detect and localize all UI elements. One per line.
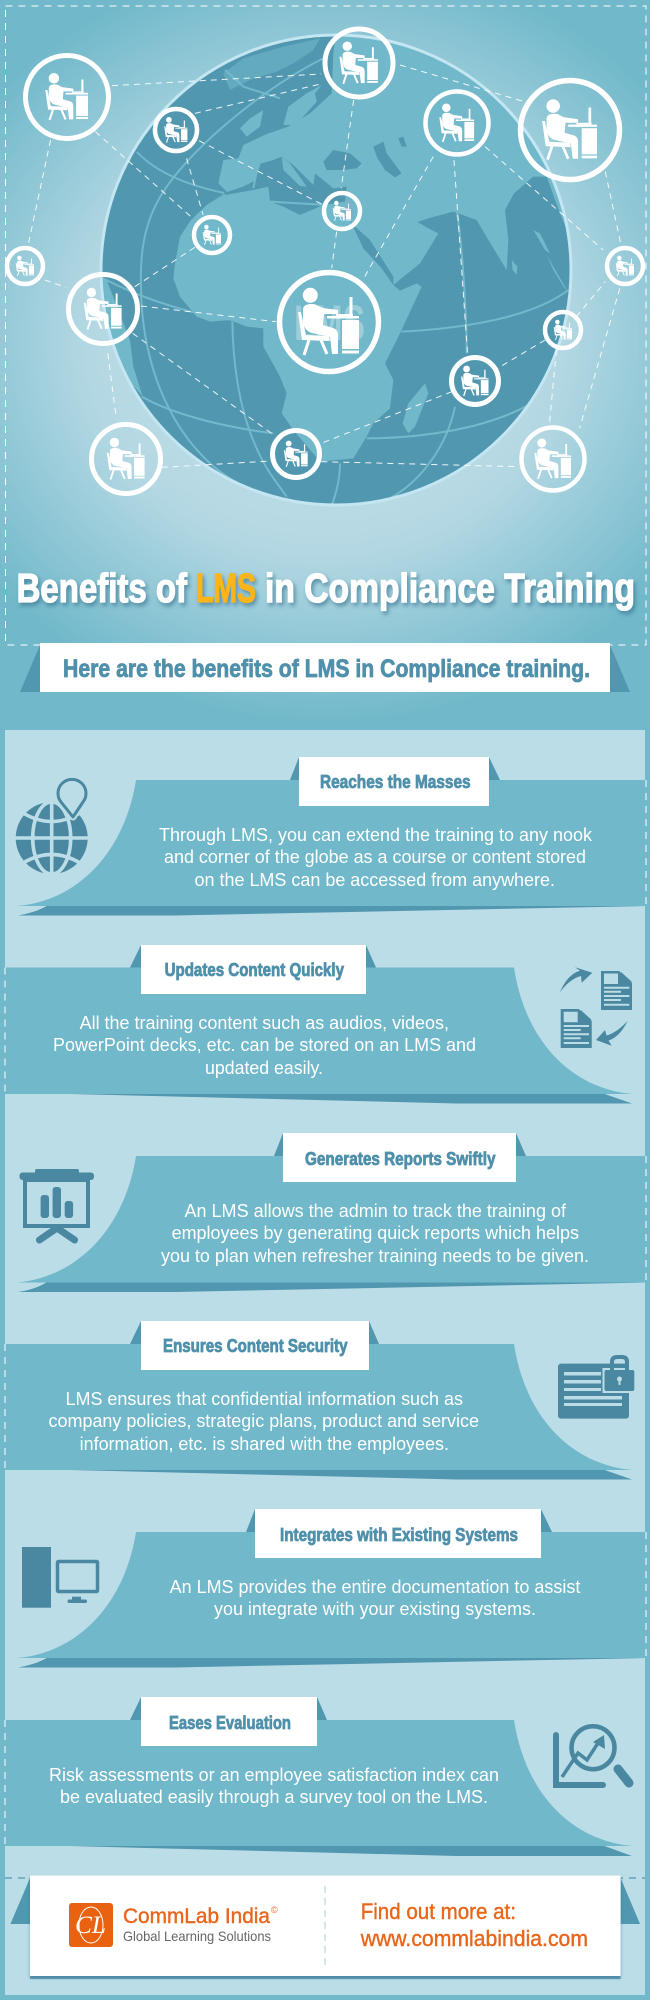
footer dashed rule	[5, 1877, 645, 1879]
header background	[0, 0, 650, 740]
node 12	[545, 312, 581, 348]
footer banner	[10, 1876, 640, 1979]
icon: documents and arrows	[560, 967, 632, 1048]
body text: LMS ensures that confidential information such as	[66, 1389, 463, 1409]
logo: Global Learning Solutions	[123, 1928, 271, 1944]
title: LMS	[196, 565, 256, 611]
body text	[53, 1013, 476, 1078]
title	[17, 565, 635, 611]
icon: presentation board	[20, 1169, 94, 1240]
benefits panel background	[5, 730, 645, 1995]
node 1	[26, 56, 108, 138]
body text: An LMS allows the admin to track the training of	[184, 1201, 567, 1221]
body text: on the LMS can be accessed from anywhere.	[194, 870, 555, 890]
node 10	[68, 274, 138, 344]
node 3	[426, 92, 488, 154]
card: Ensures Content Security	[5, 1321, 636, 1480]
body text: you to plan when refresher training needs to be given.	[161, 1246, 589, 1266]
icon: globe with pin	[14, 779, 90, 876]
globe: LMS	[294, 295, 365, 351]
body text: updated easily.	[205, 1058, 323, 1078]
body text: and corner of the globe as a course or content stored	[164, 847, 586, 867]
body text: PowerPoint decks, etc. can be stored on an LMS and	[53, 1035, 476, 1055]
icon: chart magnifier	[556, 1726, 629, 1785]
call to action: Find out more at:	[361, 1899, 516, 1924]
body text: information, etc. is shared with the employees.	[80, 1434, 449, 1454]
logo	[69, 1903, 278, 1947]
body text: employees by generating quick reports which helps	[172, 1223, 579, 1243]
node 4	[520, 80, 620, 180]
icon: locked document	[558, 1357, 636, 1419]
heading: Ensures Content Security	[163, 1336, 348, 1356]
body text: company policies, strategic plans, product and service	[48, 1411, 479, 1431]
heading: Reaches the Masses	[320, 772, 471, 792]
node 14	[272, 430, 320, 478]
body text	[159, 825, 593, 890]
call to action	[360, 1899, 588, 1951]
card: Integrates with Existing Systems	[18, 1509, 646, 1668]
card: Generates Reports Swiftly	[18, 1133, 646, 1292]
body text: Risk assessments or an employee satisfaction index can	[49, 1765, 499, 1785]
body text	[49, 1765, 499, 1807]
body text: All the training content such as audios, videos,	[80, 1013, 449, 1033]
node 16	[522, 428, 584, 490]
card: Reaches the Masses	[14, 757, 646, 916]
node 5	[155, 109, 197, 151]
node 8	[7, 248, 43, 284]
heading: Integrates with Existing Systems	[280, 1525, 518, 1545]
body text: An LMS provides the entire documentation to assist	[170, 1577, 580, 1597]
body text	[48, 1389, 479, 1454]
card: Eases Evaluation	[5, 1697, 632, 1856]
globe	[102, 36, 570, 504]
intro banner	[20, 643, 630, 692]
card: Updates Content Quickly	[5, 945, 632, 1104]
node 11 central	[280, 272, 378, 372]
body text	[170, 1577, 580, 1619]
body text: be evaluated easily through a survey tool on the LMS.	[60, 1787, 488, 1807]
logo: CommLab India	[123, 1905, 270, 1928]
node 13	[452, 358, 498, 404]
node 2	[325, 29, 393, 97]
body text	[161, 1201, 589, 1266]
heading: Updates Content Quickly	[165, 960, 344, 980]
logo: CL	[75, 1912, 106, 1939]
logo: ©	[271, 1905, 278, 1915]
node 6	[324, 193, 360, 229]
user nodes	[7, 29, 643, 494]
title: Benefits of	[17, 565, 187, 611]
dashed header frame	[6, 6, 646, 645]
node 7	[194, 217, 230, 253]
node 15	[92, 424, 160, 494]
network connection lines	[28, 65, 621, 467]
body text: you integrate with your existing systems.	[214, 1599, 536, 1619]
body text: Through LMS, you can extend the training to any nook	[159, 825, 593, 845]
node 9	[607, 248, 643, 284]
heading: Generates Reports Swiftly	[305, 1149, 496, 1169]
icon: desktop computer	[22, 1547, 98, 1608]
heading: Eases Evaluation	[169, 1713, 291, 1733]
call to action: www.commlabindia.com	[360, 1926, 588, 1951]
